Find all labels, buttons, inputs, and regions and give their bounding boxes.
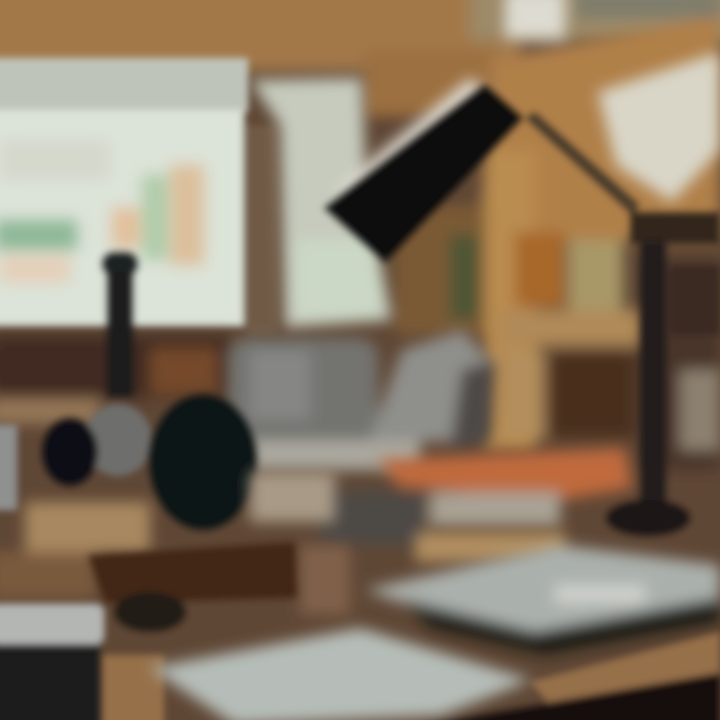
desk surface	[0, 472, 565, 615]
lamp arm	[525, 112, 720, 244]
orange book stack	[320, 448, 632, 545]
wooden desk edge	[102, 632, 720, 720]
bottom-left white object and dark block	[0, 604, 104, 720]
second board	[250, 78, 392, 328]
dark band under boards	[0, 336, 230, 424]
sheet of paper top right	[598, 52, 720, 202]
left small lamp	[0, 252, 152, 510]
grey sofa	[228, 330, 495, 470]
papers at bottom	[150, 628, 532, 720]
right lamp stand	[606, 240, 720, 536]
whiteboard left	[0, 58, 277, 335]
bookshelf	[395, 0, 720, 470]
black lamp head	[324, 78, 523, 263]
black vase	[149, 394, 257, 530]
dark wooden box	[88, 542, 297, 632]
book stack right	[365, 545, 720, 655]
whiteboard chart marks	[0, 140, 204, 283]
